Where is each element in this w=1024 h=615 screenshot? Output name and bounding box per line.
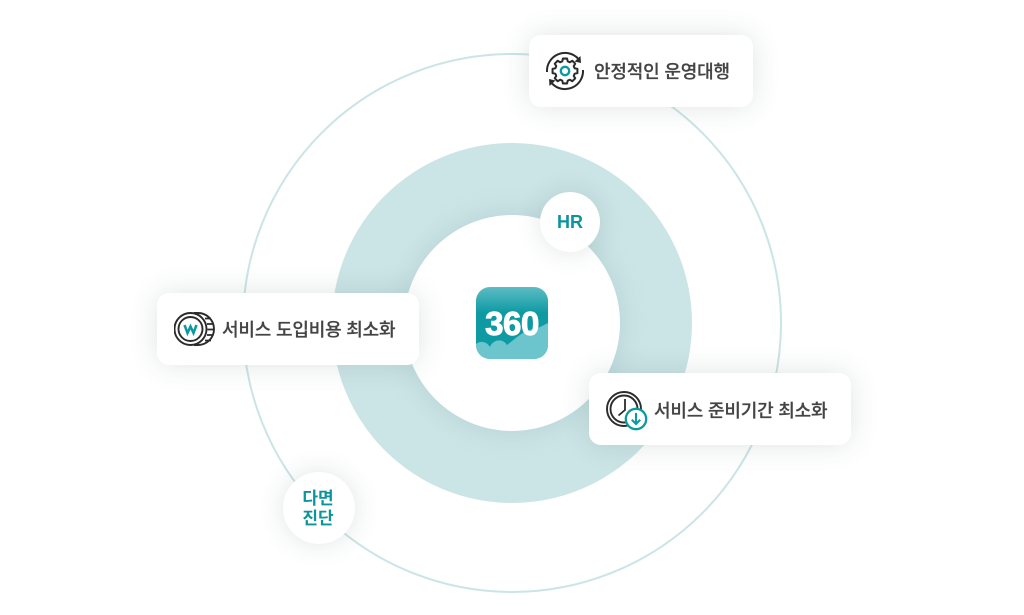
label: 서비스 도입비용 최소화 (222, 320, 395, 340)
logo text: 360 (485, 305, 539, 342)
card: 서비스 도입비용 최소화 (157, 293, 419, 365)
label: 서비스 준비기간 최소화 (654, 401, 827, 421)
icon: coin (174, 312, 215, 346)
inner white circle (404, 215, 620, 431)
bubble: 다면 진단: 진단 (302, 509, 334, 528)
label: 안정적인 운영대행 (594, 62, 730, 82)
icon: clock with down arrow (606, 391, 648, 430)
bubble: 다면 진단 (283, 472, 355, 544)
logo: 360 app icon (476, 287, 548, 359)
bubble: 다면 진단: 다면 (302, 489, 334, 508)
bubble: HR (540, 192, 600, 252)
outer ring (243, 54, 781, 592)
logo cloud (476, 323, 548, 359)
card: 안정적인 운영대행 (529, 35, 753, 107)
bubble: HR: HR (557, 212, 583, 232)
card: 서비스 준비기간 최소화 (589, 373, 851, 445)
icon: rotating gear (546, 52, 584, 90)
middle teal band (332, 143, 692, 503)
